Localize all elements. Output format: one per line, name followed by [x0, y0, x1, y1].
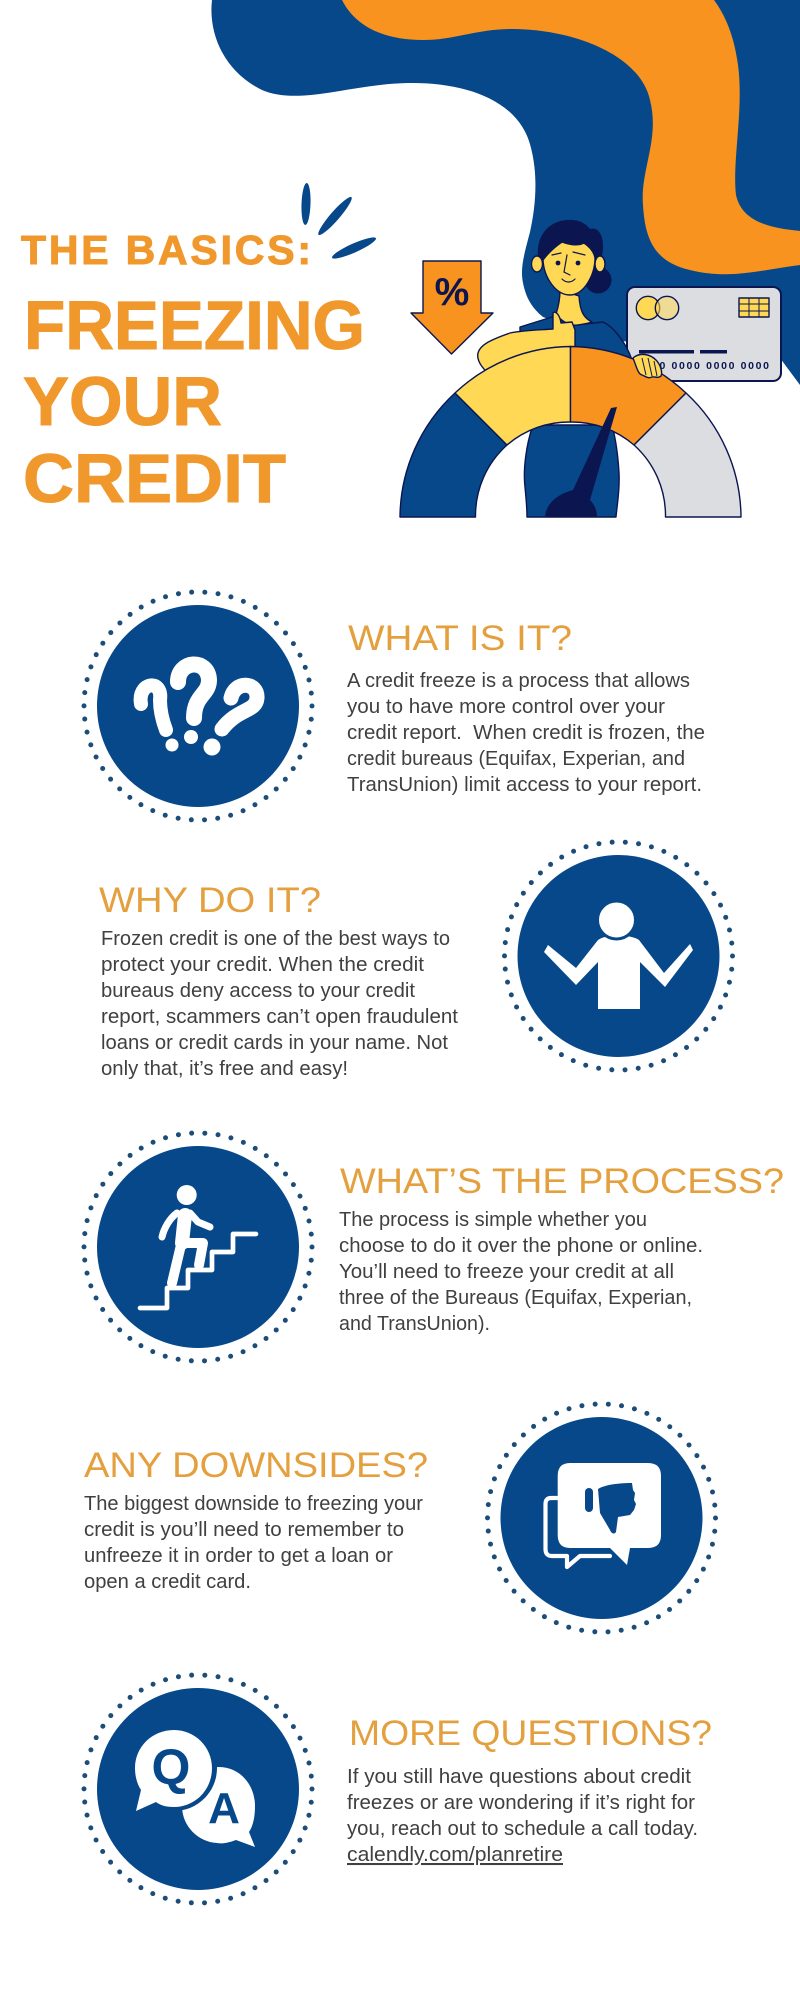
- text block: why do it: loans or credit cards in your name. Not: [101, 1031, 448, 1054]
- text block: what is it: credit report. When credit is frozen, the: [347, 721, 705, 744]
- title line: freezing: FREEZING: [24, 287, 365, 364]
- text block: why do it: report, scammers can’t open fraudulent: [101, 1005, 458, 1028]
- panel: why do it: [99, 842, 732, 1080]
- woman: legs under the gauge: [524, 425, 619, 517]
- icon: dotted ring and shrugging person: [504, 842, 732, 1070]
- woman: neck: [556, 290, 592, 325]
- heading: any downsides: ANY DOWNSIDES?: [84, 1446, 428, 1485]
- text block: what's the process: three of the Bureaus (Equifax, Experian,: [339, 1286, 692, 1309]
- icon: credit card: [627, 287, 781, 381]
- heading: why do it: WHY DO IT?: [99, 881, 321, 920]
- text block: any downsides: credit is you’ll need to remember to: [84, 1518, 404, 1541]
- text block: more questions: freezes or are wondering if it’s right for: [347, 1791, 695, 1814]
- text block: what's the process: and TransUnion).: [339, 1312, 490, 1335]
- woman: shirt: [520, 317, 632, 385]
- woman: face: [543, 242, 595, 295]
- text block: what's the process: choose to do it over the phone or online.: [339, 1234, 703, 1257]
- text block: more questions: [347, 1765, 698, 1866]
- woman: hand on gauge: [633, 354, 662, 378]
- text block: why do it: only that, it’s free and easy!: [101, 1057, 348, 1080]
- woman: arm with thumbs up: [478, 312, 575, 385]
- gauge segment: yellow: [455, 346, 570, 445]
- text block: what is it: [347, 669, 705, 796]
- heading: what's the process: WHAT’S THE PROCESS?: [340, 1162, 784, 1201]
- title: [21, 227, 365, 517]
- gauge segment: grey: [634, 393, 741, 517]
- icon: credit card: 0000 0000 0000 0000: [637, 360, 769, 372]
- icon: dotted ring and question marks: [84, 592, 312, 820]
- text block: what is it: A credit freeze is a process that allows: [347, 669, 690, 692]
- icon: dotted ring and Q and A bubbles: Q: [152, 1739, 190, 1795]
- title line: credit: CREDIT: [23, 440, 286, 517]
- text block: any downsides: open a credit card.: [84, 1570, 251, 1593]
- text block: what's the process: The process is simple whether you: [339, 1208, 647, 1231]
- heading: more questions: MORE QUESTIONS?: [349, 1714, 712, 1753]
- woman: hair: [538, 220, 603, 264]
- panel: any downsides: [84, 1404, 716, 1632]
- text block: any downsides: The biggest downside to freezing your: [84, 1492, 423, 1515]
- gauge segment: orange: [570, 346, 686, 445]
- text block: why do it: protect your credit. When the credit: [101, 953, 424, 976]
- text block: what's the process: [339, 1208, 703, 1335]
- text block: what is it: credit bureaus (Equifax, Experian, and: [347, 747, 685, 770]
- icon: dotted ring and thumbs-down speech bubbles: [488, 1404, 716, 1632]
- text block: more questions: you, reach out to schedule a call today.: [347, 1817, 698, 1840]
- gauge segment: blue: [400, 393, 507, 517]
- title line: the basics: THE BASICS:: [21, 227, 311, 273]
- text block: any downsides: unfreeze it in order to get a loan or: [84, 1544, 393, 1567]
- hero illustration: background blue blob: [211, 0, 800, 385]
- text block: what is it: you to have more control over your: [347, 695, 665, 718]
- icon: percent down arrow: %: [435, 271, 469, 314]
- icon: dotted ring and Q and A bubbles: A: [208, 1784, 240, 1833]
- text block: any downsides: [84, 1492, 423, 1593]
- text block: more questions: calendly.com/planretire: [347, 1843, 563, 1866]
- woman: ears: [532, 256, 605, 272]
- text block: more questions: If you still have questions about credit: [347, 1765, 691, 1788]
- text block: why do it: [101, 927, 458, 1080]
- text block: why do it: Frozen credit is one of the best ways to: [101, 927, 450, 950]
- chart: credit score gauge: [400, 346, 741, 517]
- panel: more questions: [84, 1675, 712, 1903]
- text block: what's the process: You’ll need to freeze your credit at all: [339, 1260, 674, 1283]
- icon: dotted ring and person climbing stairs: [84, 1133, 312, 1361]
- icon: percent down arrow: [411, 261, 493, 354]
- title line: your: YOUR: [23, 363, 222, 440]
- illustration: woman: [478, 220, 632, 517]
- gauge needle: [545, 407, 617, 517]
- hero illustration: orange wave: [342, 0, 800, 274]
- text block: what is it: TransUnion) limit access to your report.: [347, 773, 702, 796]
- woman: bun: [584, 266, 612, 294]
- icon: dotted ring and Q and A bubbles: [84, 1675, 312, 1903]
- decorative spark marks: [301, 183, 378, 262]
- text block: why do it: bureaus deny access to your credit: [101, 979, 415, 1002]
- panel: what's the process: [84, 1133, 784, 1361]
- panel: what is it: [84, 592, 705, 820]
- heading: what is it: WHAT IS IT?: [348, 619, 572, 658]
